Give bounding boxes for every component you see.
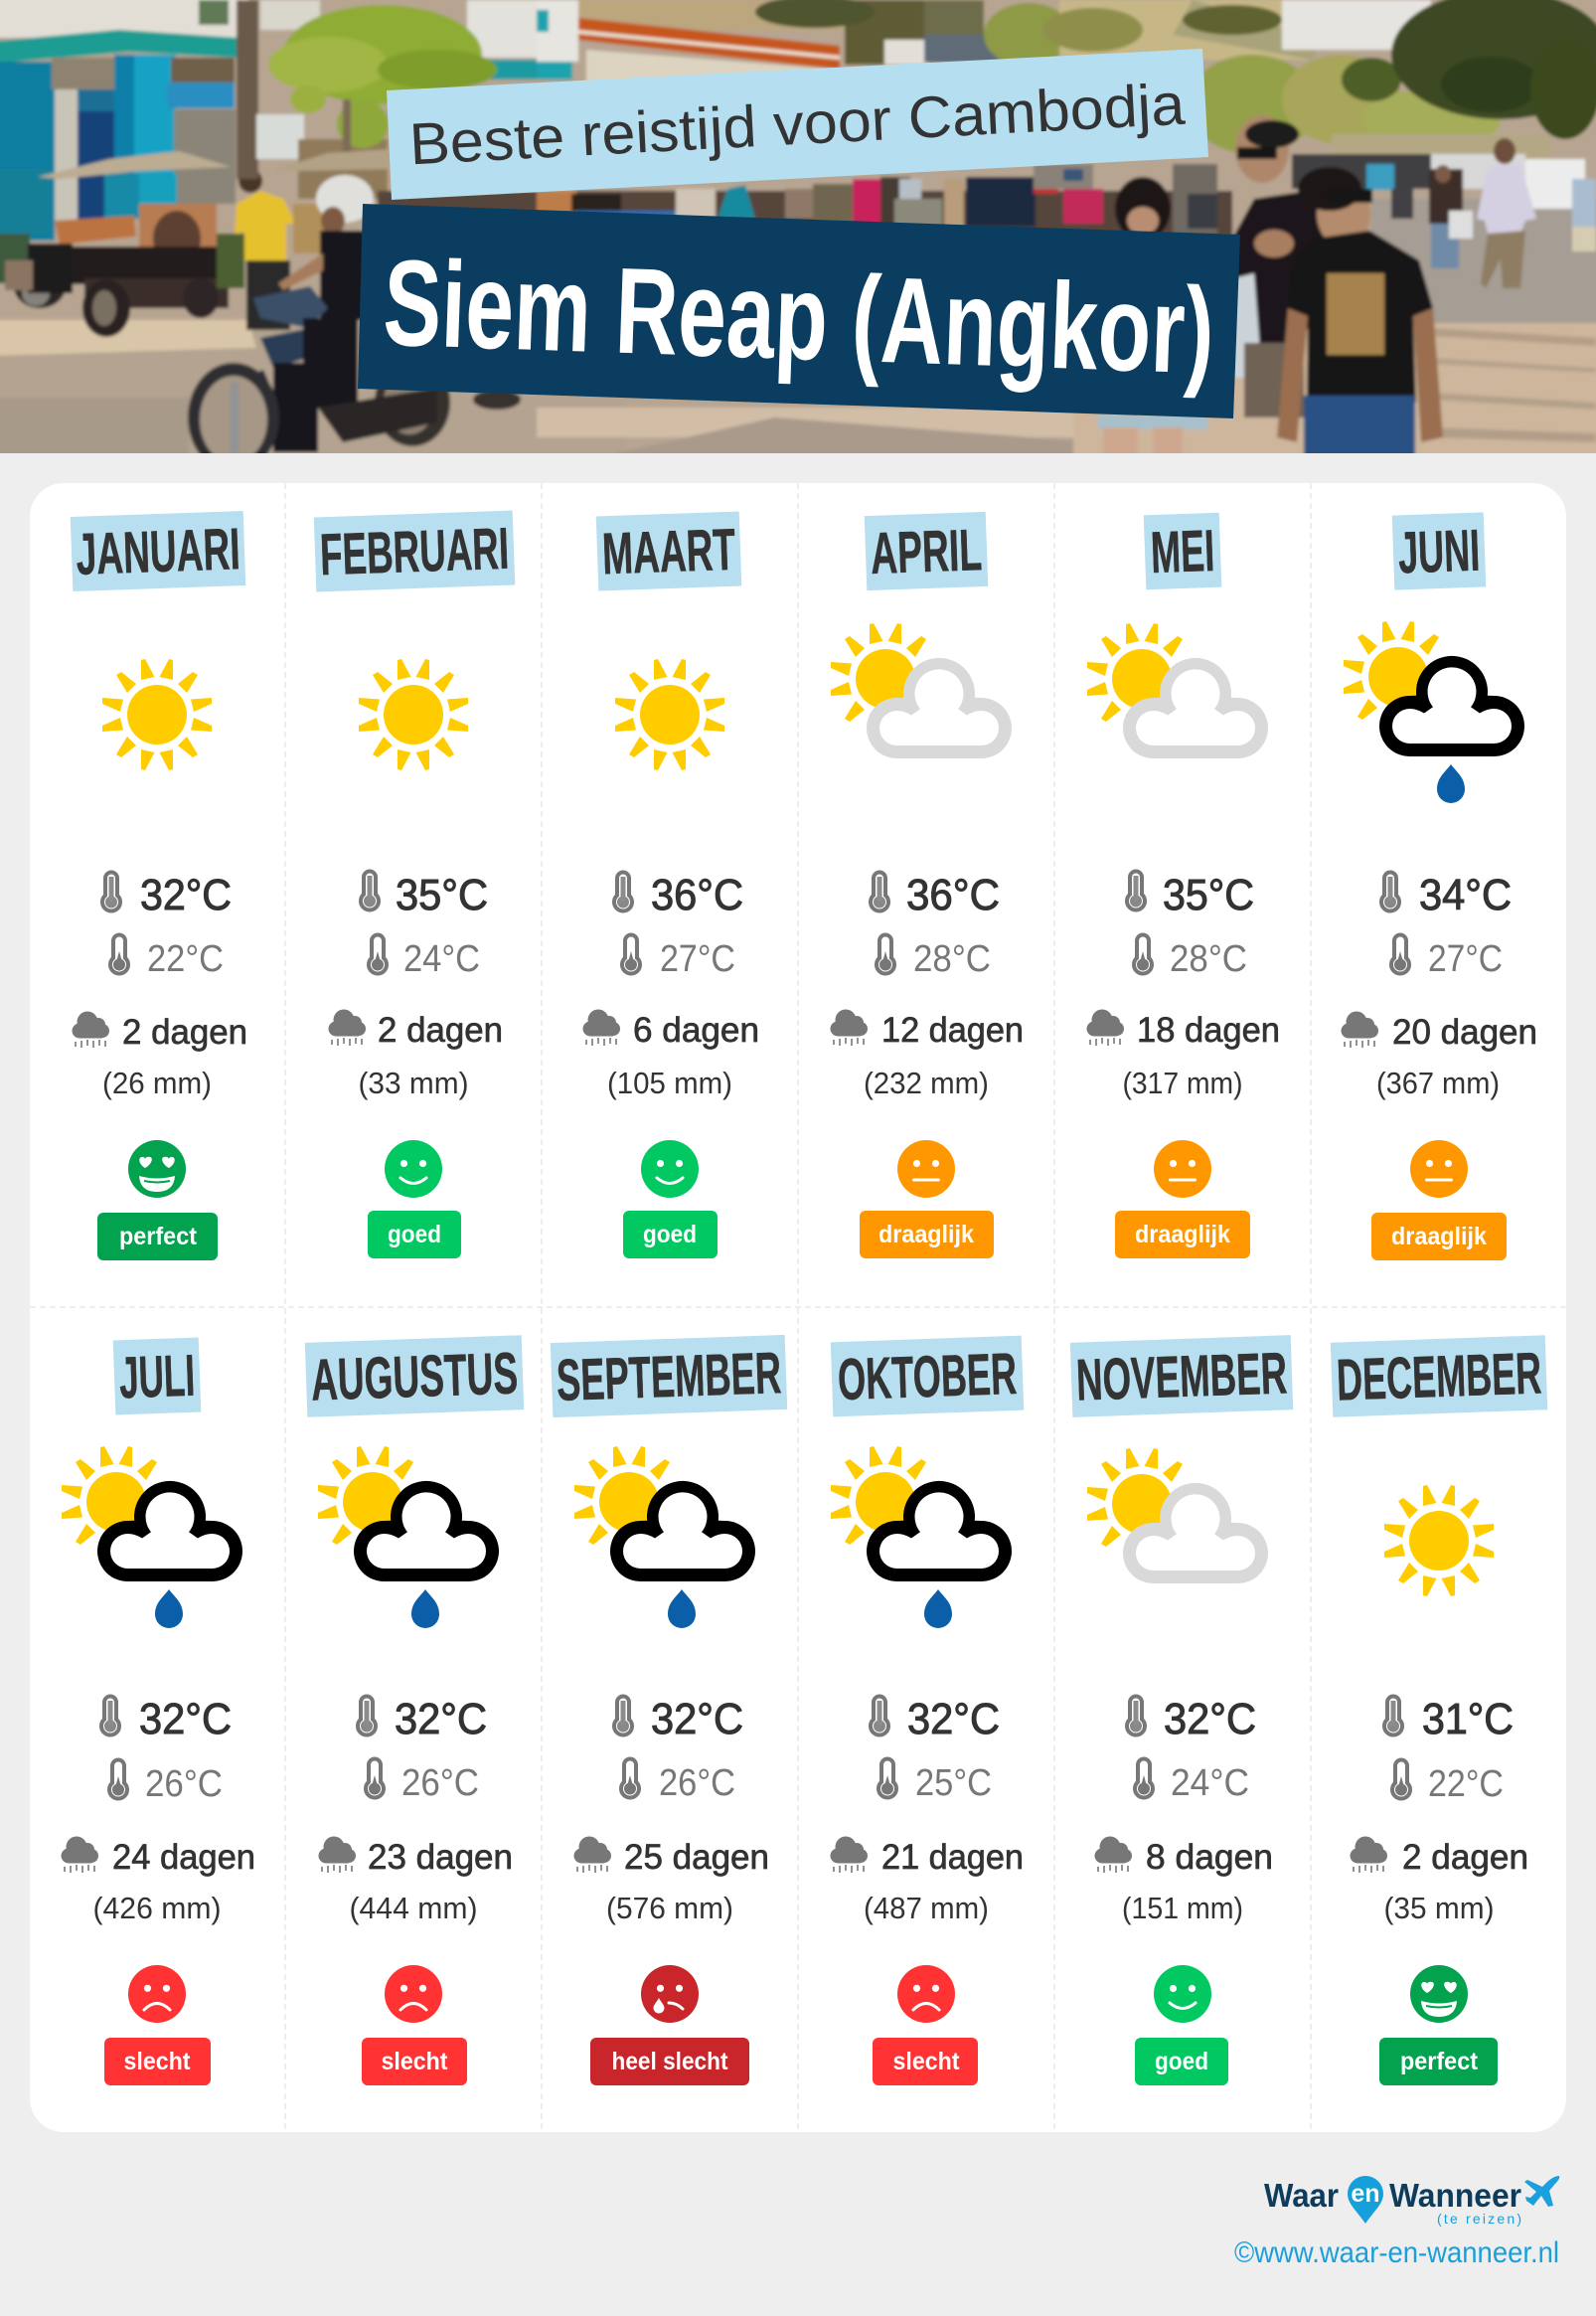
rating badge: [97, 1213, 218, 1260]
month label: [314, 511, 515, 591]
icon: thermometer low: [1392, 1759, 1410, 1799]
icon: thermometer high: [1381, 873, 1399, 911]
icon: rain: [328, 1010, 366, 1046]
low temperature: 24°C: [403, 938, 480, 980]
low temperature: 25°C: [915, 1762, 992, 1804]
rainfall: (105 mm): [607, 1066, 732, 1100]
month label: NOVEMBER: [1075, 1340, 1288, 1413]
rating badge: [623, 1211, 718, 1258]
icon: rain: [1350, 1837, 1387, 1873]
icon: thermometer high: [614, 873, 632, 911]
panel: september: [551, 1335, 787, 2085]
month label: [1144, 513, 1221, 589]
icon: good face: [641, 1140, 699, 1198]
icon: rain: [1095, 1837, 1132, 1873]
rainfall: (151 mm): [1122, 1891, 1243, 1925]
panel: augustus: [305, 1335, 524, 2085]
icon: thermometer low: [622, 934, 640, 974]
header photo: Siem Reap street: [0, 0, 1596, 472]
high temperature: 32°C: [907, 1695, 1000, 1743]
rating badge: [362, 2038, 467, 2085]
icon: sun, rain cloud and drop: [1344, 621, 1524, 803]
rain days: 12 dagen: [881, 1011, 1024, 1050]
icon: perfect face: [1410, 1965, 1468, 2023]
icon: sun behind cloud: [1087, 1448, 1268, 1583]
icon: okay face: [1410, 1140, 1468, 1198]
icon: rain: [831, 1010, 868, 1046]
rain days: 2 dagen: [122, 1013, 247, 1052]
rain days: 20 dagen: [1392, 1013, 1537, 1052]
low temperature: 22°C: [147, 938, 224, 980]
month label: APRIL: [870, 517, 983, 586]
icon: rain: [574, 1837, 611, 1873]
icon: okay face: [897, 1140, 955, 1198]
rainfall: (317 mm): [1123, 1066, 1242, 1100]
high temperature: 32°C: [140, 871, 232, 919]
rain days: 8 dagen: [1146, 1838, 1273, 1877]
icon: thermometer high: [101, 1696, 119, 1736]
logo: Waar en Wanneer: Waar: [1264, 2177, 1339, 2214]
icon: thermometer low: [1134, 934, 1152, 974]
rating badge: goed: [1155, 2048, 1208, 2075]
icon: bad face: [385, 1965, 442, 2023]
month label: [1392, 512, 1486, 590]
icon: thermometer high: [361, 871, 379, 910]
title banner: Beste reistijd voor Cambodja: [387, 49, 1208, 200]
rain days: 24 dagen: [112, 1838, 255, 1877]
panel: juni: [1342, 512, 1537, 1260]
rain days: 23 dagen: [368, 1838, 513, 1877]
icon: thermometer high: [358, 1696, 376, 1736]
high temperature: 32°C: [395, 1695, 487, 1743]
high temperature: 36°C: [651, 871, 743, 919]
high temperature: 36°C: [906, 871, 1000, 919]
icon: thermometer low: [110, 934, 128, 974]
month label: MAART: [601, 517, 736, 586]
icon: thermometer low: [369, 934, 387, 974]
month label: JANUARI: [75, 516, 241, 587]
icon: sun behind cloud: [1087, 623, 1268, 758]
icon: thermometer high: [1127, 1696, 1145, 1736]
rating badge: heel slecht: [612, 2048, 728, 2075]
title banner: Siem Reap (Angkor): Siem Reap (Angkor): [382, 235, 1216, 401]
low temperature: 28°C: [1170, 938, 1247, 980]
panel: april: [831, 512, 1024, 1258]
rating badge: slecht: [892, 2048, 960, 2075]
icon: thermometer high: [102, 873, 120, 911]
icon: thermometer low: [366, 1759, 384, 1798]
rating badge: goed: [643, 1221, 697, 1248]
month label: [1070, 1335, 1293, 1417]
rain days: 6 dagen: [633, 1011, 759, 1050]
month label: SEPTEMBER: [556, 1340, 782, 1413]
icon: rain: [1087, 1010, 1124, 1046]
rainfall: (35 mm): [1383, 1891, 1495, 1925]
month label: [113, 1338, 201, 1414]
month label: [305, 1335, 524, 1417]
panel: mei: [1087, 513, 1280, 1258]
rain days: 2 dagen: [1402, 1838, 1528, 1877]
rainfall: (487 mm): [864, 1891, 989, 1925]
low temperature: 22°C: [1428, 1763, 1504, 1805]
rating badge: [1135, 2038, 1228, 2085]
rating badge: perfect: [119, 1223, 198, 1250]
rating badge: draaglijk: [878, 1221, 974, 1248]
icon: very bad face: [641, 1965, 699, 2023]
icon: sun, rain cloud and drop: [318, 1446, 499, 1628]
rainfall: (444 mm): [350, 1891, 477, 1925]
icon: good face: [385, 1140, 442, 1198]
logo: Waar en Wanneer: en: [1351, 2180, 1380, 2208]
source url: ©www.waar-en-wanneer.nl: [1234, 2236, 1559, 2269]
rainfall: (26 mm): [102, 1066, 212, 1100]
rating badge: draaglijk: [1391, 1223, 1487, 1250]
icon: thermometer low: [877, 934, 894, 974]
rating badge: perfect: [1400, 2048, 1479, 2075]
high temperature: 32°C: [139, 1695, 232, 1743]
low temperature: 27°C: [1428, 938, 1503, 980]
icon: thermometer high: [1384, 1696, 1402, 1736]
icon: rain: [582, 1010, 620, 1046]
rainfall: (33 mm): [358, 1066, 469, 1100]
icon: thermometer high: [871, 1696, 888, 1736]
title banner: Siem Reap (Angkor): [358, 204, 1240, 418]
rainfall: (232 mm): [864, 1066, 989, 1100]
rainfall: (576 mm): [606, 1891, 733, 1925]
icon: sun: [359, 659, 468, 770]
high temperature: 32°C: [1164, 1695, 1256, 1743]
icon: good face: [1154, 1965, 1211, 2023]
low temperature: 26°C: [401, 1762, 479, 1804]
rainfall: (426 mm): [93, 1891, 221, 1925]
icon: sun: [1384, 1485, 1494, 1596]
rain days: 18 dagen: [1137, 1011, 1280, 1050]
month label: [865, 512, 988, 590]
month label: JUNI: [1397, 518, 1481, 585]
rating badge: slecht: [382, 2048, 448, 2075]
rating badge: [590, 2038, 749, 2085]
icon: bad face: [128, 1965, 186, 2023]
high temperature: 35°C: [1163, 871, 1254, 919]
month label: OKTOBER: [837, 1341, 1018, 1412]
panel: oktober: [831, 1336, 1024, 2085]
rating badge: goed: [388, 1221, 441, 1248]
icon: sun: [102, 659, 212, 770]
icon: sun, rain cloud and drop: [62, 1446, 242, 1628]
icon: thermometer low: [621, 1759, 639, 1798]
icon: bad face: [897, 1965, 955, 2023]
month label: [551, 1335, 787, 1417]
panel: juli: [62, 1338, 255, 2085]
month label: AUGUSTUS: [310, 1340, 519, 1413]
high temperature: 35°C: [396, 871, 488, 919]
panel: november: [1070, 1335, 1293, 2085]
panel: januari: [71, 511, 247, 1260]
month label: MEI: [1150, 518, 1215, 585]
high temperature: 31°C: [1422, 1695, 1514, 1743]
icon: rain: [62, 1837, 98, 1873]
icon: sun: [615, 659, 724, 770]
panel: maart: [582, 512, 759, 1258]
rating badge: [368, 1211, 461, 1258]
rating badge: draaglijk: [1135, 1221, 1230, 1248]
panel: februari: [314, 511, 515, 1258]
icon: thermometer low: [1135, 1759, 1153, 1798]
icon: rain: [1342, 1012, 1378, 1048]
low temperature: 26°C: [659, 1762, 735, 1804]
icon: sun behind cloud: [831, 623, 1012, 758]
month label: [831, 1336, 1024, 1416]
high temperature: 34°C: [1419, 871, 1512, 919]
icon: rain: [831, 1837, 868, 1873]
rating badge: [1371, 1213, 1507, 1260]
icon: thermometer low: [109, 1759, 127, 1799]
title banner: Beste reistijd voor Cambodja: Beste reistijd voor Cambodja: [407, 72, 1187, 177]
month label: JULI: [118, 1343, 196, 1410]
rating badge: slecht: [123, 2048, 191, 2075]
low temperature: 26°C: [145, 1763, 223, 1805]
logo: Waar en Wanneer: (te reizen): [1437, 2211, 1521, 2227]
month label: [596, 512, 741, 590]
high temperature: 32°C: [651, 1695, 743, 1743]
icon: thermometer high: [614, 1696, 632, 1736]
panel: month grid card: [30, 483, 1566, 2132]
rating badge: [860, 1211, 994, 1258]
rating badge: [1379, 2038, 1498, 2085]
rain days: 25 dagen: [624, 1838, 769, 1877]
rating badge: [104, 2038, 211, 2085]
low temperature: 27°C: [660, 938, 735, 980]
icon: thermometer high: [1127, 871, 1145, 910]
icon: thermometer low: [1391, 934, 1409, 974]
rain days: 2 dagen: [378, 1011, 503, 1050]
logo: Waar en Wanneer: Wanneer: [1389, 2177, 1521, 2214]
rainfall: (367 mm): [1376, 1066, 1500, 1100]
icon: rain: [72, 1012, 109, 1048]
month label: [71, 511, 245, 591]
icon: sun, rain cloud and drop: [574, 1446, 755, 1628]
logo: Waar en Wanneer: [1264, 2176, 1559, 2227]
rating badge: [1115, 1211, 1250, 1258]
low temperature: 28°C: [913, 938, 991, 980]
icon: rain: [318, 1837, 356, 1873]
rain days: 21 dagen: [881, 1838, 1024, 1877]
icon: thermometer low: [878, 1759, 896, 1798]
icon: okay face: [1154, 1140, 1211, 1198]
icon: thermometer high: [871, 873, 888, 911]
icon: perfect face: [128, 1140, 186, 1198]
month label: FEBRUARI: [319, 516, 510, 587]
low temperature: 24°C: [1171, 1762, 1249, 1804]
icon: airplane: [1524, 2176, 1559, 2207]
rating badge: [873, 2038, 978, 2085]
icon: sun, rain cloud and drop: [831, 1446, 1012, 1628]
panel: december: [1331, 1335, 1547, 2085]
